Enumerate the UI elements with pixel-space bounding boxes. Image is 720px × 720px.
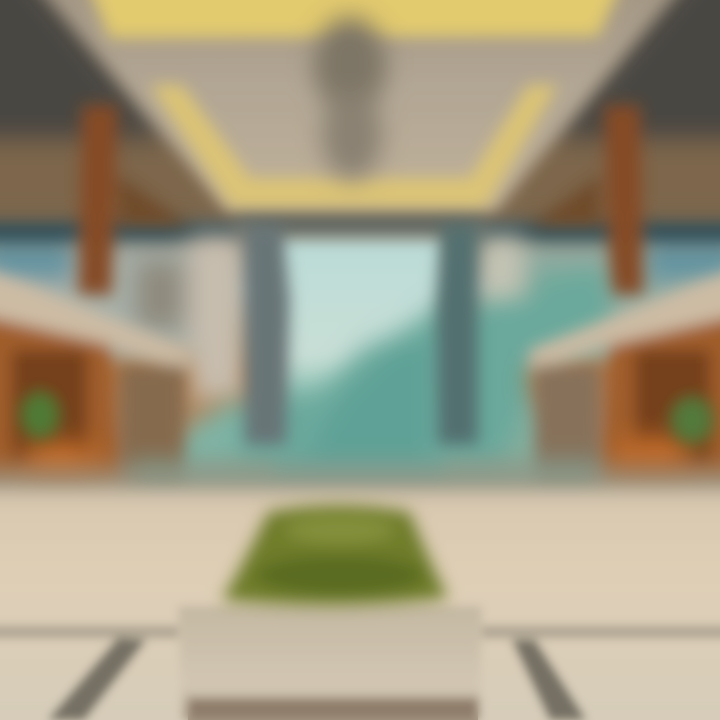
lower side walls bbox=[0, 235, 720, 400]
floor markings bbox=[0, 626, 720, 720]
orange glow under balconies bbox=[20, 437, 695, 474]
slate pillars bbox=[245, 225, 478, 445]
teal glass hill bbox=[130, 272, 620, 470]
blue horizon band bbox=[0, 216, 720, 246]
planter box bbox=[178, 606, 482, 720]
side walls: dark upper corners bbox=[0, 0, 720, 220]
right balcony bbox=[530, 260, 720, 480]
central window bbox=[275, 240, 445, 475]
moss bush bbox=[222, 505, 448, 606]
chandelier bbox=[314, 17, 386, 180]
ceiling bbox=[20, 0, 700, 212]
left balcony bbox=[0, 260, 190, 480]
floor bbox=[0, 490, 720, 720]
left plant bbox=[20, 391, 60, 439]
planter base backing bbox=[188, 704, 478, 720]
right plant bbox=[670, 396, 714, 444]
ceiling lights bbox=[78, 0, 632, 208]
wood columns bbox=[78, 105, 644, 295]
floor base shadow strip bbox=[0, 462, 720, 488]
